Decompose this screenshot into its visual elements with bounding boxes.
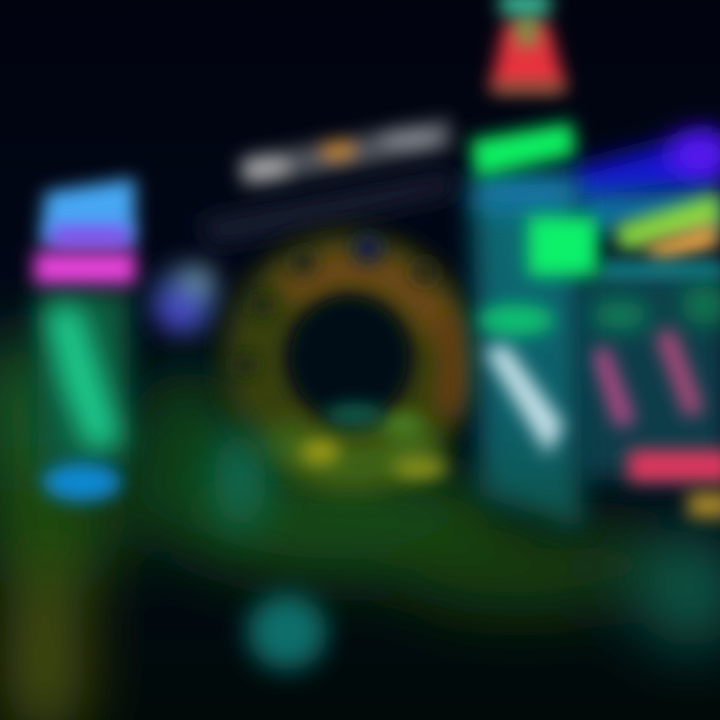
ring centre opening [291, 298, 407, 418]
foliage: dark green ground [0, 330, 720, 720]
building blue roof band [570, 130, 720, 205]
left tower violet stripe [50, 226, 130, 248]
ferris wheel ring [234, 233, 456, 480]
left tower magenta band [34, 252, 136, 284]
tower white streak [484, 344, 564, 455]
building green accent right [681, 285, 720, 325]
ring centre teal glow [325, 403, 385, 427]
building blue lower band [580, 192, 720, 232]
building green sign [528, 216, 598, 276]
building pink diagonal left [590, 346, 636, 428]
right building [570, 130, 720, 518]
building orange bar [688, 492, 720, 518]
small blue orb [151, 264, 219, 334]
teal orb on ground [247, 594, 327, 670]
building green accent [590, 301, 650, 329]
tower mid green panel [478, 304, 554, 336]
building pink diagonal right [655, 328, 704, 418]
building teal body [578, 270, 720, 480]
tower red cone [490, 22, 566, 88]
teal shrub under ring [214, 430, 266, 530]
building teal stripe [600, 262, 720, 278]
tower teal shaft [472, 185, 582, 530]
left tower body [38, 290, 130, 465]
sign shadow band [195, 172, 460, 245]
ring yellow lights [300, 413, 448, 480]
tower cone green accent [516, 14, 538, 46]
building purple roof glow [668, 131, 720, 179]
left tower blue base [42, 462, 122, 502]
left tower green streak [44, 305, 122, 452]
ring gondola holes [234, 233, 436, 376]
building yellow-green stripe [615, 192, 720, 252]
tower blue collar [475, 175, 575, 210]
tower cone base glow [492, 84, 564, 92]
ring right arc lights [442, 320, 456, 415]
left tower [34, 178, 136, 502]
tower green sign [470, 122, 576, 178]
building orange stripe [640, 222, 720, 262]
building red bar [628, 450, 720, 482]
left tower blue panel [40, 178, 135, 245]
ring base [257, 266, 441, 450]
ring upper arc lights [285, 268, 440, 330]
ring lower arc lights [275, 430, 430, 467]
tower teal tip [500, 0, 550, 14]
right tower [470, 0, 598, 530]
sign lettering glow [240, 118, 452, 188]
